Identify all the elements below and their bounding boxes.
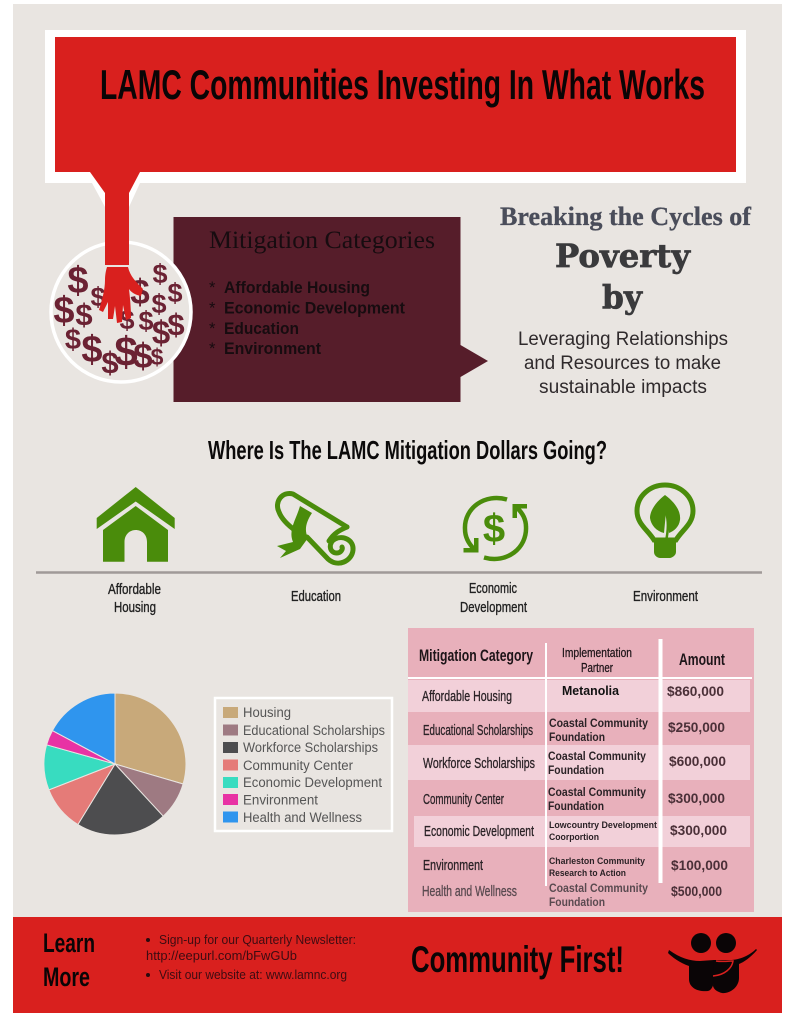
dollar signs: $: [81, 329, 103, 371]
table header: [419, 646, 725, 675]
slogan: Community First!: [411, 939, 624, 980]
divider line: [36, 571, 762, 574]
table header: Partner: [581, 661, 613, 675]
legend: Environment: [243, 792, 318, 808]
category labels: Environment: [633, 588, 699, 605]
newsletter and website links: [146, 933, 356, 982]
title speech bubble: [45, 30, 746, 240]
dollar signs: $: [65, 324, 81, 356]
table rows: partner: Research to Action: [549, 868, 626, 879]
table header: Amount: [679, 650, 725, 669]
category list: *: [209, 279, 216, 297]
table header: Implementation: [562, 646, 632, 660]
dollar signs: $: [151, 289, 167, 319]
table rows: amount: $600,000: [669, 754, 726, 769]
dollar signs: $: [138, 306, 154, 336]
learn more: [43, 928, 95, 992]
category list: *: [209, 300, 216, 318]
table rows: amount: $100,000: [671, 858, 728, 873]
newsletter and website links: Sign-up for our Quarterly Newsletter:: [159, 933, 356, 947]
learn more: More: [43, 962, 90, 992]
category list: *: [209, 340, 216, 358]
legend: [215, 698, 392, 831]
table rows: partner: Coorportion: [549, 832, 599, 843]
category labels: Housing: [114, 599, 156, 616]
table rows: category: Affordable Housing: [422, 688, 512, 705]
legend: Workforce Scholarships: [243, 740, 378, 755]
table rows: partner: Coastal Community: [548, 751, 647, 763]
icon: house: [97, 487, 175, 562]
table rows: partner: Lowcountry Development: [549, 820, 658, 831]
text block: breaking the cycles: [500, 202, 751, 398]
table rows: partner: Charleston Community: [549, 856, 646, 867]
dollar signs: [53, 259, 185, 380]
heading: where is the money going: Where Is The LAMC Mitigation Dollars Going?: [208, 435, 607, 465]
dollar signs: $: [167, 278, 183, 308]
dollar signs: $: [67, 260, 89, 302]
table rows: amount: $300,000: [668, 791, 725, 806]
dollar signs: $: [133, 337, 153, 376]
panel: mitigation categories: [174, 217, 488, 402]
table: mitigation funding: [408, 628, 754, 912]
category list: Environment: [224, 340, 321, 358]
category labels: Development: [460, 599, 528, 616]
dollar signs: $: [90, 282, 106, 312]
dollar signs: $: [119, 305, 135, 335]
legend: Community Center: [243, 758, 353, 773]
pie chart: [44, 693, 186, 835]
dollar signs: $: [152, 314, 170, 351]
arm: [105, 190, 129, 265]
text block: breaking the cycles: and Resources to make: [524, 353, 721, 374]
table rows: amount: $860,000: [667, 684, 724, 699]
icon: hand reaching into circle of dollars: [51, 172, 191, 382]
table rows: category: Workforce Scholarships: [423, 755, 535, 772]
newsletter and website links: Visit our website at: www.lamnc.org: [159, 968, 347, 982]
icon: diploma scroll: [277, 493, 353, 563]
table rows: partner: Metanolia: [562, 684, 620, 698]
dollar signs: $: [152, 259, 168, 289]
table rows: partner: Coastal Community: [549, 883, 649, 895]
text block: breaking the cycles: Breaking the Cycles of: [500, 202, 751, 231]
learn more: Learn: [43, 928, 95, 958]
newsletter and website links: http://eepurl.com/bFwGUb: [146, 949, 297, 963]
panel heading: Mitigation Categories: [209, 227, 435, 254]
dollar signs: $: [101, 345, 119, 380]
icon: circular dollar arrows: $: [483, 507, 505, 551]
category list: Education: [224, 320, 299, 338]
table rows: category: Educational Scholarships: [423, 722, 533, 739]
dollar signs: $: [114, 328, 138, 375]
category list: Economic Development: [224, 300, 405, 318]
category list: *: [209, 320, 216, 338]
text block: breaking the cycles: Leveraging Relationships: [518, 329, 728, 350]
category labels: Affordable: [108, 581, 161, 598]
table rows: category: Environment: [423, 857, 484, 874]
dollar signs: $: [53, 290, 75, 332]
table rows: partner: Foundation: [548, 765, 604, 777]
text block: breaking the cycles: Poverty: [555, 237, 691, 275]
category list: [209, 279, 405, 358]
category labels: Economic: [469, 580, 517, 597]
dollar signs: $: [167, 307, 185, 342]
legend: Health and Wellness: [243, 810, 362, 825]
dollar signs: $: [75, 297, 93, 332]
table rows: category: Health and Wellness: [422, 883, 517, 900]
table rows: partner: Coastal Community: [548, 787, 647, 799]
table rows: partner: [548, 684, 658, 909]
icon: circular dollar arrows: [464, 498, 527, 559]
legend: Housing: [243, 705, 291, 720]
table header: Mitigation Category: [419, 646, 533, 665]
table rows: partner: Foundation: [549, 897, 605, 909]
category labels: [108, 580, 699, 616]
dollar signs: $: [130, 273, 150, 312]
footer band: [13, 917, 782, 1013]
table rows: partner: Foundation: [548, 801, 604, 813]
table rows: category: [422, 688, 535, 900]
text block: breaking the cycles: by: [602, 278, 643, 316]
table rows: amount: [667, 684, 728, 899]
table rows: amount: $250,000: [668, 720, 725, 735]
table rows: category: Community Center: [423, 791, 504, 808]
table rows: amount: $300,000: [670, 823, 727, 838]
icon: two people embracing: [668, 933, 757, 993]
legend: Economic Development: [243, 775, 382, 790]
table rows: category: Economic Development: [424, 823, 535, 840]
legend: Educational Scholarships: [243, 723, 385, 738]
category labels: Education: [291, 588, 341, 605]
table rows: partner: Coastal Community: [549, 718, 649, 730]
hand: [99, 267, 143, 323]
table rows: partner: Foundation: [549, 732, 605, 744]
table rows: amount: $500,000: [671, 884, 722, 899]
dollar signs: $: [151, 344, 164, 370]
icon: light bulb with leaf: [637, 485, 693, 558]
text block: breaking the cycles: sustainable impacts: [539, 377, 707, 398]
category list: Affordable Housing: [224, 279, 370, 297]
